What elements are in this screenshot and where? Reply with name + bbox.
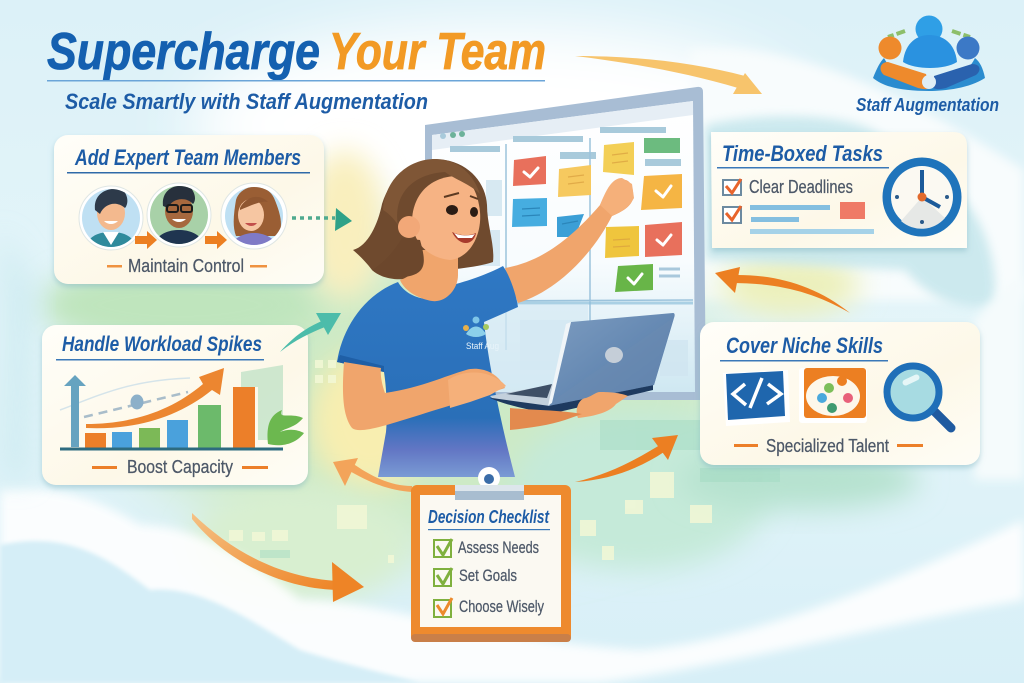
panel: cover niche skills	[700, 322, 980, 465]
placeholder lines and envelope	[750, 202, 874, 234]
panel: time-boxed tasks	[711, 132, 967, 248]
item: set goals: Set Goals	[459, 567, 517, 585]
item: choose wisely: Choose Wisely	[459, 598, 545, 616]
heading: Handle Workload Spikes	[62, 333, 262, 356]
hair back	[353, 159, 493, 279]
panel: add expert team members	[54, 135, 352, 284]
heading: Cover Niche Skills	[726, 333, 883, 358]
panel: sticky-note board	[425, 87, 706, 400]
person: woman with laptop	[337, 159, 675, 477]
logo: staff augmentation	[856, 16, 999, 115]
arrow: orange to board	[715, 267, 850, 313]
typing hand	[448, 372, 506, 408]
arrow: to laptop	[575, 435, 678, 482]
board frame	[425, 87, 706, 400]
eyes and smile	[444, 193, 478, 243]
label: boost capacity: Boost Capacity	[127, 457, 233, 477]
label: maintain control: Maintain Control	[128, 256, 244, 276]
laptop	[490, 313, 675, 414]
arrow: to woman	[333, 458, 412, 492]
subtitle: Scale Smartly with Staff Augmentation	[65, 89, 428, 114]
panel: decision checklist clipboard	[411, 467, 571, 642]
hair top	[383, 159, 480, 225]
bar chart	[60, 365, 304, 449]
neck	[400, 250, 458, 301]
arrow: large bottom left	[192, 513, 364, 602]
title: your team: Your Team	[329, 23, 546, 81]
logo: staff augmentation: Staff Augmentation	[856, 95, 999, 115]
avatar: woman	[221, 183, 287, 249]
board	[411, 485, 571, 642]
heading: Add Expert Team Members	[74, 145, 301, 170]
sticky notes	[512, 138, 682, 292]
shaded lower board	[432, 305, 588, 392]
avatar: man with glasses	[146, 182, 212, 248]
title underline	[47, 80, 545, 82]
checkbox	[723, 179, 741, 195]
heading: Decision Checklist	[428, 507, 550, 527]
icon: magnifier	[887, 366, 951, 428]
icon: code	[723, 370, 790, 426]
t-shirt	[337, 266, 518, 477]
checkbox	[723, 206, 741, 223]
item: choose wisely	[434, 598, 545, 617]
hand under laptop	[577, 392, 628, 418]
arrow: teal	[280, 313, 341, 352]
label: specialized talent: Specialized Talent	[766, 436, 889, 456]
item: assess needs	[434, 539, 539, 557]
paper	[420, 495, 561, 627]
label: boost capacity	[92, 457, 268, 477]
title: supercharge: Supercharge	[47, 23, 320, 81]
clip	[455, 467, 524, 500]
arrow: between avatars	[205, 231, 227, 249]
icon: clock	[882, 158, 962, 236]
raised arm	[505, 180, 633, 303]
item: set goals	[434, 567, 517, 586]
title	[47, 23, 546, 114]
icon: palette	[799, 368, 867, 423]
heading: Time-Boxed Tasks	[722, 141, 883, 166]
sleeve shadow	[337, 355, 384, 372]
arrow: between avatars	[135, 231, 157, 249]
plant	[268, 410, 304, 445]
arrow: top yellow	[575, 56, 762, 94]
shirt logo	[463, 316, 499, 351]
board surface	[432, 101, 695, 392]
arrow: green dotted	[292, 208, 352, 231]
left arm	[343, 362, 505, 430]
shirt logo: Staff Aug	[466, 341, 499, 351]
item: assess needs: Assess Needs	[458, 539, 539, 557]
avatar: man	[78, 185, 144, 251]
text: clear deadlines: Clear Deadlines	[749, 177, 853, 197]
face	[412, 176, 480, 260]
panel: handle workload spikes	[42, 325, 308, 485]
